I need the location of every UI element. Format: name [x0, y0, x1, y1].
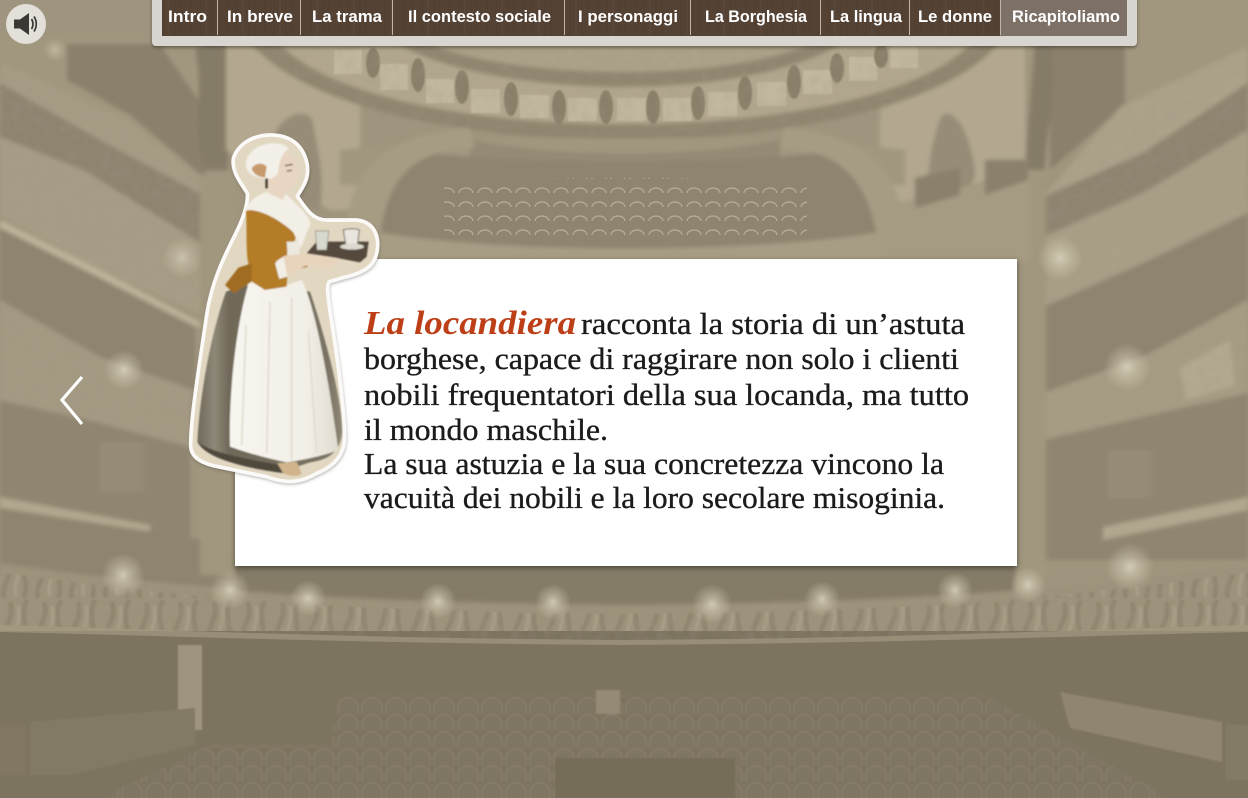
nav item: In breve: In breve: [227, 7, 293, 26]
left doors: [100, 442, 144, 492]
title phrase: La locandiera: La locandiera: [363, 305, 576, 342]
stage opening: [375, 152, 880, 255]
stalls: [0, 631, 1248, 798]
feet: [277, 462, 302, 476]
nav item: Intro: Intro: [168, 7, 207, 26]
lights: [43, 38, 1154, 624]
nav item: Il contesto sociale: Il contesto sociale: [408, 7, 551, 26]
ear drop: [265, 178, 268, 188]
beige walls beside the dome: [226, 40, 360, 210]
seating rows: [100, 695, 1170, 798]
left side tiers: [0, 40, 200, 190]
cap: [246, 143, 288, 179]
foliage: [262, 114, 322, 210]
arm and sleeve: [276, 253, 340, 277]
ledge: [372, 232, 884, 262]
parapet ornament: [0, 572, 1248, 636]
tray: [307, 242, 369, 262]
figure: the chocolate girl: [188, 133, 382, 486]
dome rings: [250, 42, 1000, 140]
nav item: I personaggi: I personaggi: [578, 7, 678, 26]
cup: [343, 229, 359, 246]
sticker outline: [191, 135, 378, 481]
line 2: borghese, capace di raggirare non solo i clienti: [364, 341, 959, 376]
ornate arch scrolls: [345, 128, 475, 250]
navigation bar: [150, 0, 1139, 50]
skirt: [197, 285, 342, 472]
gallery seats: [444, 178, 807, 243]
line 1: racconta la storia di un’astuta: [581, 306, 965, 341]
sound button: [6, 4, 46, 44]
dome panels: [334, 46, 918, 121]
right side tiers: [1030, 0, 1248, 197]
line 4: il mondo maschile.: [364, 412, 608, 447]
nav item: La Borghesia: La Borghesia: [705, 7, 808, 26]
line 5: La sua astuzia e la sua concretezza vincono la: [364, 446, 944, 481]
nav item: La lingua: La lingua: [830, 7, 903, 26]
nav item: Ricapitoliamo: Ricapitoliamo: [1012, 7, 1120, 26]
head: [268, 152, 298, 200]
nav item: La trama: La trama: [312, 7, 383, 26]
eye and brow: [285, 164, 293, 171]
band below the dome: [340, 139, 905, 185]
right doors: [1108, 450, 1152, 498]
proscenium columns: [200, 175, 236, 575]
nav item: Le donne: Le donne: [918, 7, 992, 26]
line 6: vacuità dei nobili e la loro secolare misoginia.: [364, 480, 945, 515]
line 3: nobili frequentatori della sua locanda, ma tutto: [364, 377, 969, 412]
central zone below the card: [235, 560, 1015, 610]
fichu: [244, 191, 310, 248]
previous arrow: [60, 376, 84, 425]
door and balcony fronts: [178, 645, 202, 730]
apron: [230, 279, 338, 462]
text card: [235, 259, 1017, 566]
bodice: [246, 210, 308, 290]
main parapet: [0, 563, 1248, 642]
glass: [315, 231, 329, 250]
right upper box: [880, 172, 1030, 262]
